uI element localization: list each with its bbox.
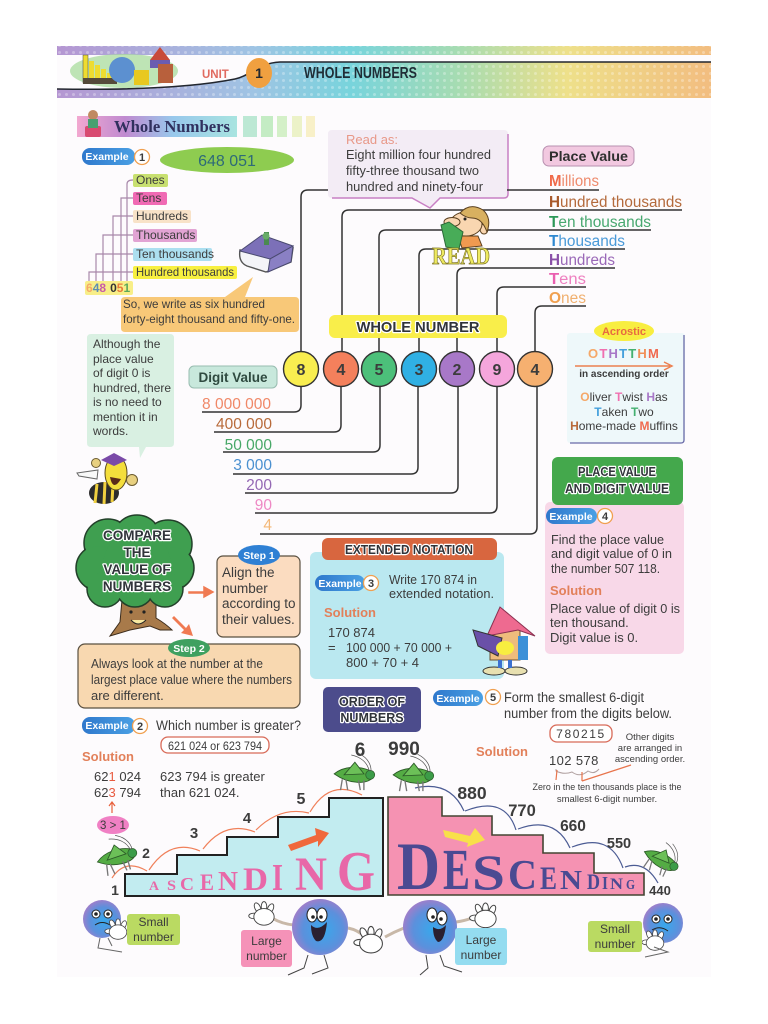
- read-as callout: Read as:: [346, 132, 398, 147]
- number oval 648 051: 648 051: [198, 153, 256, 170]
- panel: acrostic: Home-made Muffins: [570, 419, 678, 433]
- icon: small reader: [85, 110, 101, 137]
- note: digit 0: is no need to: [93, 395, 162, 409]
- descending word: I: [602, 873, 608, 893]
- character: small number right: [642, 903, 683, 957]
- unit label: UNIT: [202, 69, 229, 81]
- digit circle labels: 9: [493, 362, 502, 379]
- tree title: THE: [124, 545, 150, 560]
- tree title: NUMBERS: [103, 579, 171, 594]
- section heading: whole numbers: Whole Numbers: [114, 117, 231, 136]
- note: digit 0: Although the: [93, 337, 161, 351]
- note: digit 0: hundred, there: [93, 381, 171, 395]
- step numbers: 440: [649, 883, 671, 898]
- page background: [57, 46, 711, 977]
- panel: step 2: Step 2: [173, 643, 205, 655]
- label: small number left: Small: [138, 915, 169, 929]
- digit value connector lines: [202, 387, 537, 534]
- label: small number left: [127, 914, 180, 945]
- panel: place value and digit value: [545, 457, 684, 654]
- arrow: downward: [443, 828, 485, 847]
- panel: acrostic: Acrostic: [602, 326, 646, 338]
- ascending word: A: [149, 878, 160, 893]
- panel: example 2: Solution: [82, 749, 134, 764]
- place value labels: [549, 173, 682, 307]
- descending word: E: [540, 861, 557, 897]
- panel: example 2: 621 024 or 623 794: [168, 739, 262, 753]
- label: small number left: number: [133, 930, 174, 944]
- icon: compare tree: [76, 515, 194, 636]
- chart: descending staircase: [388, 739, 686, 904]
- header illustration: blocks: [70, 47, 178, 88]
- example 4 badge: 4: [602, 511, 609, 523]
- ascending word: E: [200, 870, 214, 895]
- place value connector lines: [301, 190, 682, 351]
- panel: place value and digit value: and digit value of 0 in: [551, 546, 672, 561]
- place value tree for 648 051: Ten thousands: [136, 247, 214, 261]
- character: large number left: [249, 899, 384, 975]
- section heading: whole numbers: [77, 110, 315, 137]
- digit circle labels: 5: [375, 362, 384, 379]
- descending word: D: [397, 828, 440, 904]
- example 3 badge: 3: [368, 578, 374, 590]
- unit title: WHOLE NUMBERS: [304, 65, 417, 82]
- place value heading: Place Value: [549, 148, 628, 164]
- panel: place value and digit value: Place value of digit 0 is: [550, 601, 680, 616]
- descending word: G: [626, 878, 635, 893]
- place value labels: Thousands: [549, 233, 625, 250]
- example 1 badge: 1: [139, 152, 145, 164]
- panel: example 2: 621 024: [94, 769, 141, 784]
- number oval 648 051: [160, 147, 294, 173]
- panel: place value and digit value: Solution: [550, 583, 602, 598]
- digit value heading: Digit Value: [198, 370, 268, 385]
- place value heading: [543, 146, 634, 166]
- place value tree for 648 051: [85, 173, 237, 295]
- panel: example 2: [82, 717, 301, 834]
- panel: example 5: 102 578: [549, 753, 599, 768]
- step curves: [112, 789, 362, 878]
- step numbers: 1: [111, 882, 119, 898]
- panel: step 2: Always look at the number at the: [91, 656, 263, 671]
- descending word: N: [560, 865, 583, 895]
- example 2 badge: Example: [85, 720, 129, 732]
- example 5 badge: Example: [436, 693, 480, 705]
- panel: example 5: number from the digits below.: [504, 706, 672, 721]
- step numbers: 770: [508, 802, 536, 820]
- panel: acrostic: [567, 321, 685, 443]
- panel: place value and digit value: the number 507 118.: [551, 561, 660, 576]
- example 2 badge: 2: [137, 721, 143, 733]
- panel: step 1: number: [222, 581, 268, 596]
- descending word: D: [587, 869, 600, 894]
- digit circle labels: 8: [297, 362, 306, 379]
- callout: written form: [121, 277, 299, 332]
- panel: step 1: [217, 545, 300, 637]
- arrow: tree to step 2: [172, 616, 193, 636]
- whole number bar: [329, 315, 507, 338]
- place value tree for 648 051: Hundred thousands: [136, 265, 234, 279]
- order of numbers heading: ORDER OF: [339, 695, 405, 709]
- unit number badge: 1: [255, 65, 263, 81]
- whole number bar: WHOLE NUMBER: [356, 319, 480, 336]
- callout: written form: forty-eight thousand and fifty-one.: [123, 312, 295, 326]
- example 4 badge: [546, 508, 612, 524]
- label: large number right: Large: [466, 933, 497, 947]
- panel: place value and digit value: Digit value is 0.: [550, 630, 638, 645]
- grasshopper: [393, 754, 434, 791]
- panel: place value and digit value: AND DIGIT VALUE: [565, 482, 669, 496]
- example 1 badge: Example: [85, 151, 129, 163]
- digit circle labels: 4: [337, 362, 346, 379]
- character: small number left: [83, 900, 128, 952]
- panel: step 1: their values.: [222, 612, 295, 627]
- note: digit 0: place value: [93, 352, 154, 366]
- place value tree for 648 051: Hundreds: [136, 209, 188, 223]
- read-as callout: Eight million four hundred: [346, 148, 491, 162]
- read-as callout: [328, 130, 508, 208]
- panel: place value and digit value: ten thousand.: [550, 615, 629, 630]
- panel: example 2: 623 794 is greater: [160, 769, 265, 784]
- panel: example 2: than 621 024.: [160, 785, 240, 800]
- digit circle labels: 2: [453, 362, 462, 379]
- place value labels: Hundred thousands: [549, 194, 682, 211]
- digit circle labels: 4: [531, 362, 540, 379]
- arrow: tree to step 1: [189, 587, 213, 597]
- place value labels: Tens: [549, 271, 586, 288]
- panel: example 5: Form the smallest 6-digit: [504, 690, 644, 705]
- place value tree for 648 051: Tens: [136, 191, 161, 205]
- order of numbers heading: NUMBERS: [340, 711, 404, 725]
- digit circle labels: 3: [415, 362, 424, 379]
- example 3 badge: [315, 575, 378, 591]
- panel: acrostic: in ascending order: [579, 369, 669, 380]
- panel: step 1: Align the: [222, 565, 275, 580]
- place value labels: Ten thousands: [549, 214, 651, 231]
- place value tree for 648 051: Ones: [136, 173, 165, 187]
- step numbers: 660: [560, 818, 586, 835]
- icon: house with book: [473, 607, 535, 675]
- chart: ascending staircase: [92, 740, 383, 903]
- ascending word: [149, 841, 375, 903]
- descending word: N: [610, 876, 623, 893]
- note: digit 0: mention it in: [93, 410, 158, 424]
- example 2 badge: [82, 717, 148, 734]
- ascending word: D: [243, 862, 268, 898]
- panel: step 1: Step 1: [243, 550, 275, 562]
- panel: acrostic: OTHTTHM: [588, 346, 660, 361]
- place value tree for 648 051: 648 051: [86, 281, 130, 295]
- place value labels: Millions: [549, 173, 599, 190]
- panel: example 5: [433, 690, 685, 805]
- ascending word: C: [180, 874, 194, 894]
- panel: extended notation: extended notation.: [389, 586, 494, 601]
- step numbers: 550: [607, 836, 631, 852]
- digit value numbers: [202, 396, 272, 534]
- ascending word: I: [272, 857, 283, 899]
- example 3 badge: Example: [318, 578, 362, 590]
- step numbers: 880: [457, 783, 487, 803]
- order of numbers heading: [323, 687, 421, 732]
- panel: example 5: are arranged in: [618, 743, 682, 754]
- panel: extended notation: Solution: [324, 605, 376, 620]
- panel: example 5: Zero in the ten thousands place is the: [532, 782, 682, 793]
- panel: acrostic: Oliver Twist Has: [580, 390, 668, 404]
- panel: step 2: [78, 639, 300, 708]
- digit value numbers: 4: [263, 517, 272, 534]
- panel: step 2: largest place value where the numbers: [91, 672, 292, 687]
- label: small number right: Small: [600, 922, 630, 936]
- panel: example 5: 780215: [556, 727, 606, 741]
- panel: example 5: Other digits: [626, 732, 675, 743]
- ascending word: S: [167, 878, 176, 894]
- tree title: VALUE OF: [103, 562, 171, 577]
- digit value numbers: 400 000: [216, 416, 272, 433]
- step numbers: 5: [297, 791, 306, 808]
- panel: example 2: Which number is greater?: [156, 718, 301, 733]
- tree title: COMPARE: [103, 528, 171, 543]
- panel: extended notation: 170 874: [328, 625, 375, 640]
- panel: extended notation: EXTENDED NOTATION: [345, 542, 473, 557]
- panel: example 2: 3 > 1: [100, 820, 126, 832]
- step curves: [415, 786, 658, 883]
- arrow: upward: [288, 828, 329, 851]
- example 5 badge: 5: [490, 692, 496, 704]
- label: large number left: [241, 930, 292, 967]
- descending word: [397, 828, 635, 904]
- digit circles 8 453 294: [284, 352, 552, 386]
- panel: extended notation: [310, 538, 535, 679]
- panel: step 2: are different.: [91, 688, 164, 703]
- step numbers: 3: [190, 825, 198, 842]
- place value labels: Hundreds: [549, 252, 615, 269]
- label: large number right: number: [461, 948, 501, 962]
- grasshopper: [92, 831, 141, 878]
- digit circle labels: [297, 362, 540, 379]
- panel: extended notation: 100 000 + 70 000 +: [346, 640, 452, 655]
- label: large number right: [455, 928, 507, 965]
- step numbers: 6: [355, 740, 365, 761]
- panel: example 5: ascending order.: [615, 754, 685, 765]
- digit value numbers: 8 000 000: [202, 396, 271, 413]
- icon: reading boy: [432, 207, 490, 270]
- digit value numbers: 50 000: [225, 437, 272, 454]
- panel: example 5: smallest 6-digit number.: [557, 794, 657, 805]
- step numbers: [388, 739, 671, 898]
- step numbers: [111, 740, 365, 898]
- example 5 badge: [433, 690, 500, 706]
- panel: extended notation: 800 + 70 + 4: [346, 655, 419, 670]
- grasshopper: [638, 834, 686, 881]
- icon: graduate bee: [77, 453, 138, 504]
- descending word: S: [472, 844, 505, 900]
- READ word: READ: [432, 244, 490, 270]
- place value labels: Ones: [549, 290, 586, 307]
- panel: step 1: according to: [222, 596, 296, 611]
- panel: place value and digit value: Find the place value: [551, 532, 664, 547]
- label: small number right: [588, 921, 642, 952]
- header band: [57, 46, 711, 98]
- tree title: [103, 528, 171, 594]
- step numbers: 4: [243, 810, 252, 827]
- unit number badge: [246, 58, 272, 88]
- note: digit 0: words.: [92, 424, 128, 438]
- icon: purple book: [240, 232, 293, 272]
- digit value numbers: 200: [246, 477, 272, 494]
- panel: example 2: 623 794: [94, 785, 141, 800]
- example 1 badge: [82, 148, 150, 165]
- step numbers: 990: [388, 739, 420, 760]
- ascending word: N: [295, 848, 327, 901]
- callout: written form: So, we write as six hundred: [123, 297, 265, 311]
- panel: example 5: Solution: [476, 744, 528, 759]
- descending word: C: [508, 853, 537, 899]
- label: small number right: number: [595, 937, 635, 951]
- digit value numbers: 90: [255, 497, 272, 514]
- panel: extended notation: Write 170 874 in: [389, 572, 477, 587]
- label: large number left: number: [246, 949, 287, 963]
- label: large number left: Large: [251, 934, 282, 948]
- descending word: E: [443, 837, 470, 902]
- character: large number right: [385, 900, 497, 975]
- digit value heading: [189, 366, 277, 388]
- place value tree for 648 051: Thousands: [136, 228, 195, 242]
- panel: place value and digit value: PLACE VALUE: [578, 465, 656, 479]
- read-as callout: hundred and ninety-four: [346, 180, 483, 194]
- digit value numbers: 3 000: [233, 457, 272, 474]
- note: digit 0: [87, 334, 174, 458]
- grasshopper: [334, 753, 375, 790]
- example 4 badge: Example: [549, 511, 593, 523]
- panel: acrostic: Taken Two: [594, 405, 654, 419]
- read-as callout: fifty-three thousand two: [346, 164, 479, 178]
- ascending word: G: [337, 841, 375, 903]
- step numbers: 2: [142, 845, 150, 861]
- ascending word: N: [218, 866, 239, 896]
- panel: extended notation: =: [328, 640, 336, 655]
- note: digit 0: of digit 0 is: [93, 366, 150, 380]
